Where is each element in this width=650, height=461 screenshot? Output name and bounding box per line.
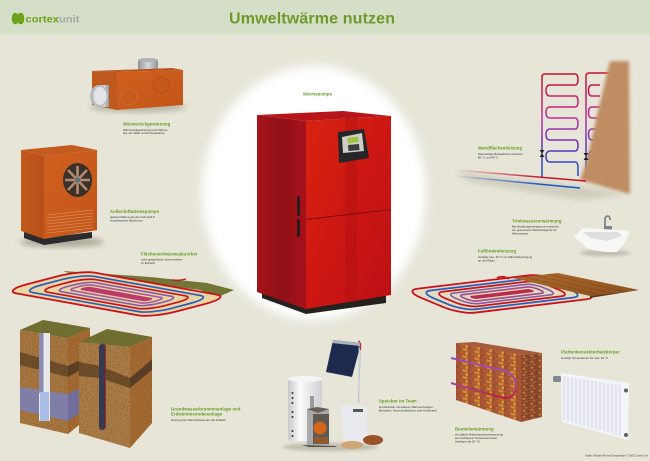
label: Grundwasserbrunnenanlage: Grundwasserbrunnenanlage und [171,406,241,412]
left pipe serpentine [542,74,578,177]
label: Wärmerückgewinnung [123,122,171,135]
valve [553,376,561,382]
block 2 clay layer [79,362,130,388]
cabinet top face [257,111,391,121]
label: Fußbodenheizung: an den Raum [478,258,495,262]
pipe stubs [497,277,509,279]
right pipe serpentine [586,73,609,176]
heading: Wärmepumpe: Wärmepumpe [303,92,333,96]
well shaft [39,333,50,421]
brick front [456,343,521,422]
block 2 right face [130,337,152,448]
base plinth [262,292,386,314]
label: Plattenkonvektorheizkörper: benötigt Temperaturen bis max. 40 °C [561,356,608,360]
borehole probe [99,344,106,430]
wood stove [302,396,337,447]
credit line: Grafik: Michael Römer/Energieatlas © 2006 Cortex Unit [585,454,648,458]
label: Wandflächenheizung: Raumseitige Belegdichten zwischen [478,152,523,156]
wall [580,61,630,194]
label: Flächenerdwärmeabsorber: nutzt gespeicherte Sonnenwärme [141,258,183,262]
label: Flächenerdwärmeabsorber [141,252,198,265]
panel: heat pump [257,92,391,314]
block 2 top face [79,329,152,347]
panel: groundwater well [20,320,241,448]
faucet [605,216,610,228]
logo: cortexunit [26,13,80,25]
pipe ends [172,279,186,280]
block 1 front face [20,330,68,434]
label: Grundwasserbrunnenanlage: Nutzung des Wärmeflusses aus der Erdtiefe [171,418,226,422]
panel: radiator [553,350,629,440]
panel: brick wall [451,342,542,444]
collector loops [2,270,231,318]
label: Bauteilerwärmung: auf niedrigstem Temperaturniveau [455,436,498,440]
control panel [338,129,369,163]
return pipe [455,176,580,188]
label: Trinkwassererwärmung: der gemeinsam Überbeitragsmix für [512,228,557,232]
label: Speicher im Team: kombinierbar mit anderen Wärmeerzeugern: [379,405,434,409]
header band [0,0,650,34]
label: Außenluftwärmepumpe [110,209,160,222]
basin [574,228,630,252]
radiator body [561,373,629,440]
label: Bauteilerwärmung [455,426,503,444]
label: Bauteilerwärmung: (niedriger als 20 °C) [455,440,480,444]
block 1 clay layer [20,352,68,377]
wood chips [341,441,363,449]
panel: ground collector [2,252,234,318]
wood panel [513,273,639,298]
label: Außenluftwärmepumpe: verschiedenen Bauformen [110,218,143,222]
label: Wandflächenheizung: 80 °C und 40 °C [478,155,498,159]
panel: air source heat pump [20,145,160,247]
label: Bauteilerwärmung: Bauteilerwärmung [455,426,494,432]
label: Plattenkonvektorheizkörper: Plattenkonvektorheizkörper [561,350,620,354]
floor loops [403,274,601,314]
valves [540,150,588,160]
label: Trinkwassererwärmung: Trinkwassererwärmung [512,218,562,224]
solar panel [326,340,361,377]
brick top [456,342,542,355]
louvres [47,210,93,233]
label: Flächenerdwärmeabsorber: Flächenerdwärmeabsorber [141,252,198,256]
top duct [138,58,158,70]
label: Speicher im Team [379,398,437,412]
label: Grundwasserbrunnenanlage [171,406,241,422]
cabinet front face [306,116,391,309]
title: Umweltwärme nutzen [229,10,395,28]
unit body [21,145,97,239]
label: Trinkwassererwärmung: Warmwasser [512,232,528,236]
label: Wärmerückgewinnung: Wärmerückgewinnung nutzt Wärme [123,128,168,132]
label: Fußbodenheizung: benötigt max. 30 °C zur Wärmeübertragung [478,255,533,259]
label: Bauteilerwärmung: ermöglicht Wärmespeicherbegrenzung [455,432,503,436]
label: Grundwasserbrunnenanlage: Erdwärmesondenanlage [171,412,223,416]
grass strip [63,271,234,297]
orange box [92,68,183,110]
label: Wandflächenheizung [478,146,523,159]
block 1 top face [20,320,90,338]
embedded pipe [451,358,516,398]
supply pipe [455,170,586,181]
panel: sink [512,216,630,256]
unit base [24,232,92,245]
label: Flächenerdwärmeabsorber: im Erdreich [141,261,156,265]
panel: wall heating [455,61,630,200]
brick side [521,353,542,422]
solar pipes [358,342,362,403]
block 1 groundwater [20,387,68,421]
label: Wärmerückgewinnung: aus der Abluft und Prozesswärme [123,131,165,135]
label: Fußbodenheizung [478,248,533,262]
panel: solar and storage team [282,340,437,451]
block 2 front face [79,342,130,448]
label: Außenluftwärmepumpe: gewinnt Wärme aus der Außenluft in [110,215,156,219]
label: Fußbodenheizung: Fußbodenheizung [478,248,516,254]
panel: heat recovery [90,58,186,135]
wood pile [363,435,383,445]
cabinet side face [257,115,306,309]
label: Wandflächenheizung: Wandflächenheizung [478,146,523,150]
label: Trinkwassererwärmung [512,218,562,236]
side duct [90,85,109,107]
label: Außenluftwärmepumpe: Außenluftwärmepumpe [110,209,160,214]
boiler [340,405,367,446]
label: Plattenkonvektorheizkörper [561,350,620,360]
block 1 right face [68,328,90,434]
label: Speicher im Team: Biomasse, Sonnenkollektoren oder Holzkessel [379,408,437,412]
panel: floor heating [403,248,639,314]
storage tank [288,376,322,441]
white glow behind heat pump [202,66,426,320]
label: Speicher im Team: Speicher im Team [379,398,417,404]
fan [63,163,92,197]
label: Wärmerückgewinnung: Wärmerückgewinnung [123,122,171,127]
label: Trinkwassererwärmung: Bereitstellungsenergiepreis entspricht [512,224,559,228]
floor shadow [455,172,630,200]
